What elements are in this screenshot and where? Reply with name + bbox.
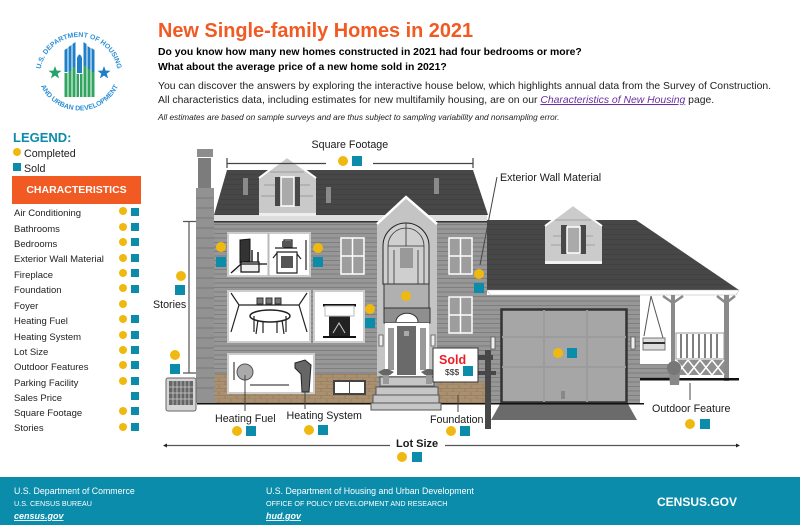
garage roof	[487, 220, 739, 290]
stories label	[153, 271, 186, 311]
outdoor feature label: Outdoor Feature	[652, 403, 730, 415]
fireplace picture	[314, 291, 364, 342]
sold sign: $$$	[445, 367, 459, 377]
door	[384, 308, 430, 323]
lot size arrow and label	[163, 438, 740, 462]
exterior wall material label	[474, 172, 601, 293]
intro questions: Do you know how many new homes constructed in 2021 had four bedrooms or more?	[158, 47, 582, 58]
characteristics list: Bathrooms	[14, 224, 60, 235]
foundation label: Foundation	[430, 414, 484, 426]
footer: census bureau: census.gov	[14, 511, 65, 521]
chimney	[196, 149, 214, 403]
outdoor feature label	[652, 383, 730, 429]
driveway	[491, 404, 637, 420]
parking markers	[553, 348, 577, 358]
footer: hud	[266, 486, 474, 521]
square footage dimension line	[227, 158, 473, 168]
footer: census bureau	[14, 486, 135, 521]
characteristics heading	[12, 176, 141, 204]
characteristics list: Fireplace	[14, 270, 53, 281]
intro questions: What about the average price of a new home sold in 2021?	[158, 62, 447, 73]
characteristics list: Bedrooms	[14, 239, 58, 250]
air conditioning markers	[170, 350, 180, 374]
logo: HUD seal: AND URBAN DEVELOPMENT	[40, 84, 118, 110]
roof vents	[243, 178, 439, 203]
dormer	[259, 157, 316, 216]
sold sign: Sold	[439, 353, 466, 367]
foyer marker	[401, 291, 411, 301]
title: New Single-family Homes in 2021	[158, 20, 473, 42]
heating system label	[286, 392, 362, 435]
footer: census bureau: U.S. Department of Commerce	[14, 486, 135, 496]
stories label: Stories	[153, 299, 186, 311]
footer: hud: hud.gov	[266, 511, 302, 521]
logo: HUD seal	[36, 32, 122, 110]
logo: HUD seal: U.S. DEPARTMENT OF HOUSING	[36, 32, 122, 68]
porch	[640, 295, 739, 385]
steps	[371, 377, 441, 410]
garage dormer	[545, 205, 602, 264]
heating picture	[228, 354, 314, 393]
square footage label	[312, 139, 388, 166]
foundation	[197, 374, 487, 404]
exterior wall material label: Exterior Wall Material	[500, 172, 601, 184]
stories dimension line	[183, 222, 196, 373]
garage lamps	[491, 337, 635, 349]
characteristics heading: CHARACTERISTICS	[26, 184, 127, 196]
footer	[0, 477, 800, 525]
characteristics list: Square Footage	[14, 408, 82, 419]
foundation label	[430, 395, 484, 436]
fireplace markers	[365, 304, 375, 328]
windows	[341, 238, 472, 333]
characteristics list: Heating Fuel	[14, 316, 68, 327]
characteristics list: Lot Size	[14, 347, 48, 358]
garage door	[502, 310, 626, 402]
bathroom and bedroom picture	[228, 233, 310, 276]
heating fuel label: Heating Fuel	[215, 413, 276, 425]
entry gable	[377, 197, 437, 376]
intro text	[158, 81, 771, 106]
legend: LEGEND:	[13, 130, 72, 145]
heating fuel label	[215, 375, 276, 436]
characteristics list: Heating System	[14, 332, 81, 343]
sold sign	[433, 348, 478, 382]
bathroom markers	[216, 242, 226, 267]
footer: census.gov: CENSUS.GOV	[657, 495, 737, 509]
main wall	[214, 221, 487, 403]
intro text: All characteristics data, including estimates for new multifamily housing, are on our Characteristics of New Housing page.	[158, 95, 714, 106]
disclaimer: All estimates are based on sample surveys and are thus subject to sampling variability and nonsampling error.	[157, 113, 559, 122]
footer: hud: U.S. Department of Housing and Urban Development	[266, 486, 474, 496]
heating system label: Heating System	[286, 410, 362, 422]
main roof	[214, 170, 488, 215]
garage wall	[487, 295, 640, 403]
planters	[378, 369, 437, 384]
characteristics list: Foundation	[14, 285, 62, 296]
house illustration	[166, 149, 739, 429]
intro questions	[158, 47, 582, 73]
legend	[13, 130, 76, 175]
footer: census bureau: U.S. CENSUS BUREAU	[14, 499, 92, 508]
characteristics list: Outdoor Features	[14, 362, 89, 373]
dining room picture	[228, 291, 310, 342]
square footage label: Square Footage	[312, 139, 388, 151]
characteristics list: Stories	[14, 423, 44, 434]
characteristics list: Sales Price	[14, 393, 62, 404]
characteristics list: Parking Facility	[14, 378, 79, 389]
footer: hud: OFFICE OF POLICY DEVELOPMENT AND RESEARCH	[266, 499, 447, 508]
intro text: You can discover the answers by exploring the interactive house below, which highlights annual data from the Survey of Construction.	[158, 81, 771, 92]
air conditioner	[166, 378, 196, 411]
for sale post	[478, 350, 496, 429]
legend: Sold	[24, 163, 45, 175]
characteristics list: Air Conditioning	[14, 208, 81, 219]
bedroom markers	[313, 243, 323, 267]
lot size arrow and label: Lot Size	[396, 438, 438, 450]
characteristics list: Exterior Wall Material	[14, 254, 104, 265]
legend: Completed	[24, 148, 76, 160]
characteristics list: Foyer	[14, 301, 38, 312]
characteristics list	[14, 207, 139, 434]
